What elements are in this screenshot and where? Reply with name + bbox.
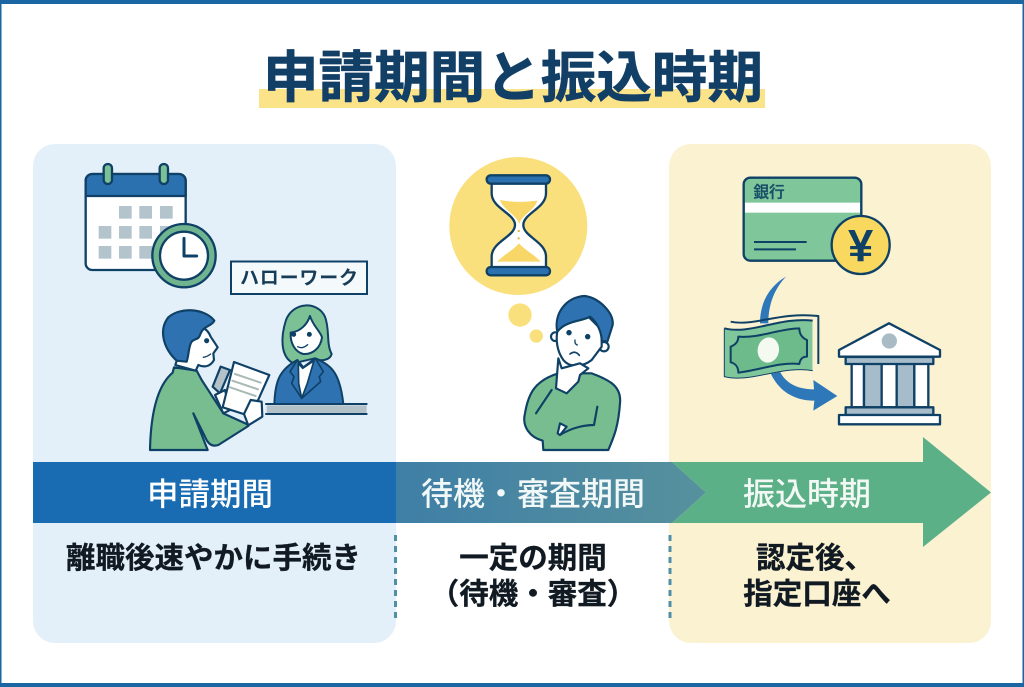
step 3: transfer timing arrow: 振込時期 (743, 476, 871, 512)
step 2: waiting and review period (396, 462, 706, 523)
step 2: waiting and review period: 待機・審査期間 (421, 476, 645, 512)
icon: bank card with yen coin: ¥ (848, 221, 874, 272)
title with yellow highlight: 申請期間と振込時期 (263, 47, 763, 109)
icon: bank card with yen coin: 銀行 (753, 183, 785, 201)
illustration: counter staff woman (266, 305, 367, 414)
icon: bank card with yen coin (744, 178, 890, 274)
icon: thought bubble with hourglass (449, 157, 587, 343)
panel: application period background (33, 144, 396, 643)
illustration: thinking man (524, 296, 620, 450)
timeline arrow bar (33, 437, 991, 547)
illustration: applicant man holding documents (150, 310, 269, 450)
icon: banknote (724, 315, 818, 378)
text: promptly after leaving job: 離職後速やかに手続き (66, 542, 361, 575)
step 3: transfer timing arrow (672, 437, 991, 547)
step 1: application period: 申請期間 (147, 476, 273, 512)
arrow: blue curve from card through cash to bank (760, 277, 837, 411)
panel: transfer timing background (669, 144, 991, 643)
text: waiting and review: （待機・審査） (430, 578, 636, 611)
dotted dividers (396, 535, 670, 622)
sign: Hello Work: ハローワーク (240, 267, 358, 289)
text: to designated account: 指定口座へ (743, 578, 891, 611)
text: after approval: 認定後、 (756, 542, 874, 575)
sign: Hello Work (231, 262, 367, 294)
icon: calendar with clock (86, 164, 216, 287)
icon: bank building (839, 323, 940, 424)
text: fixed period: 一定の期間 (459, 542, 607, 575)
step 1: application period (33, 462, 396, 523)
